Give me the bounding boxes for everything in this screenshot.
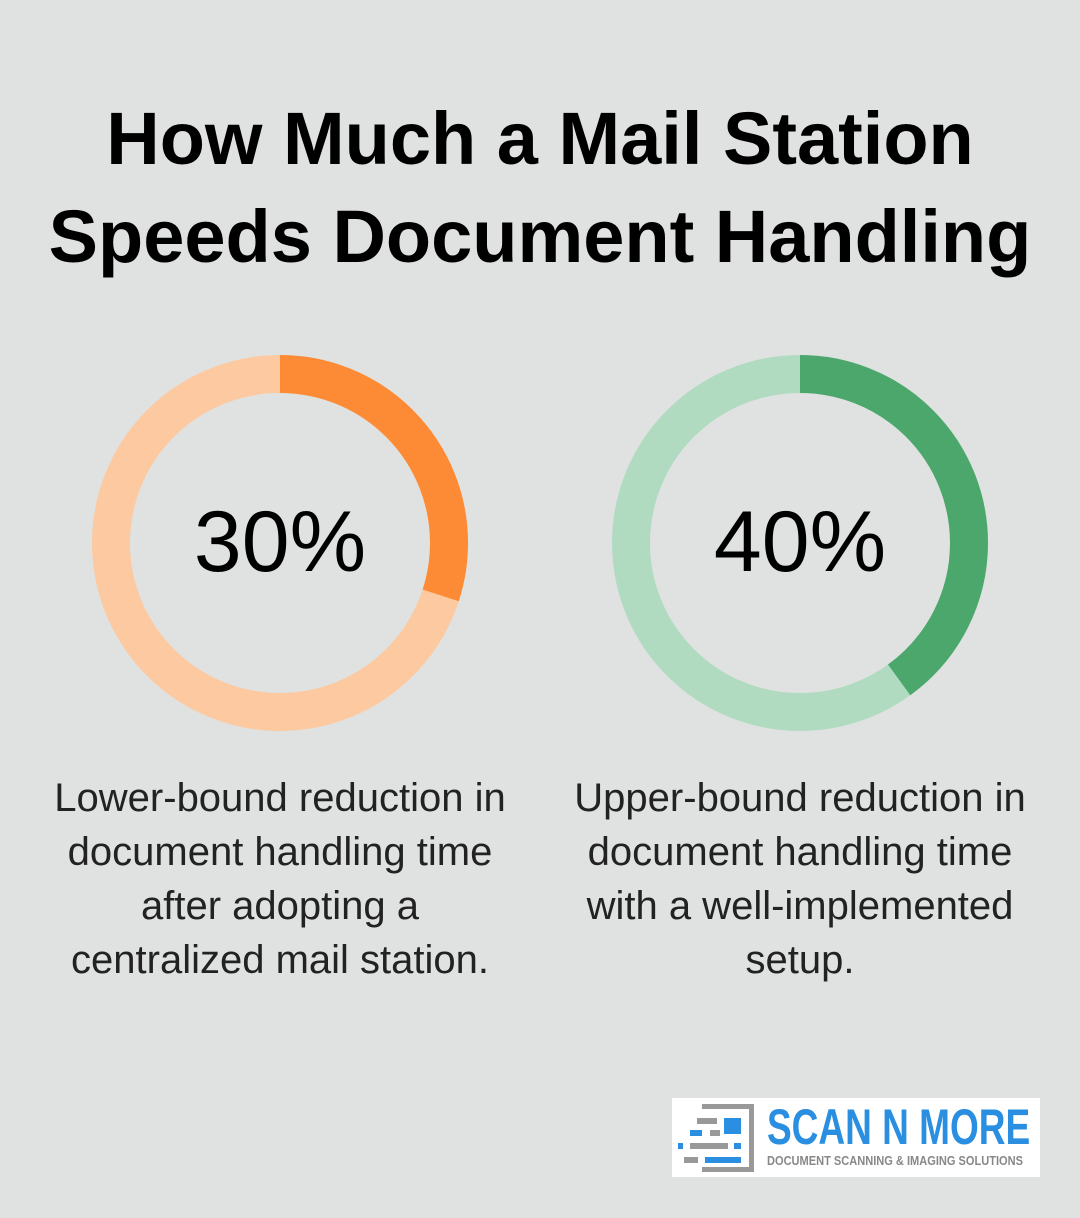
text: right description bbox=[574, 776, 1026, 982]
logo: DOCUMENT SCANNING & IMAGING SOLUTIONS bbox=[767, 1153, 1023, 1168]
text: left description bbox=[54, 776, 506, 982]
title: Speeds Document Handling bbox=[49, 195, 1031, 278]
logo bbox=[672, 1098, 1040, 1177]
text: right description: document handling time bbox=[588, 830, 1012, 874]
text: left description: Lower-bound reduction in bbox=[54, 776, 506, 820]
text: left description: after adopting a bbox=[141, 884, 419, 928]
text: left description: centralized mail station. bbox=[71, 938, 489, 982]
title: How Much a Mail Station bbox=[106, 97, 974, 180]
logo: SCAN N MORE bbox=[767, 1099, 1030, 1155]
chart: donut 40%: 40% bbox=[714, 494, 886, 590]
text: right description: with a well-implemented bbox=[587, 884, 1013, 928]
text: right description: Upper-bound reduction in bbox=[574, 776, 1026, 820]
text: right description: setup. bbox=[746, 938, 854, 982]
icon: scanner bbox=[678, 1104, 754, 1172]
chart: donut 30% bbox=[92, 355, 468, 731]
chart: donut 40% bbox=[612, 355, 988, 731]
chart: donut 30%: 30% bbox=[194, 494, 366, 590]
title bbox=[49, 97, 1031, 278]
text: left description: document handling time bbox=[68, 830, 492, 874]
